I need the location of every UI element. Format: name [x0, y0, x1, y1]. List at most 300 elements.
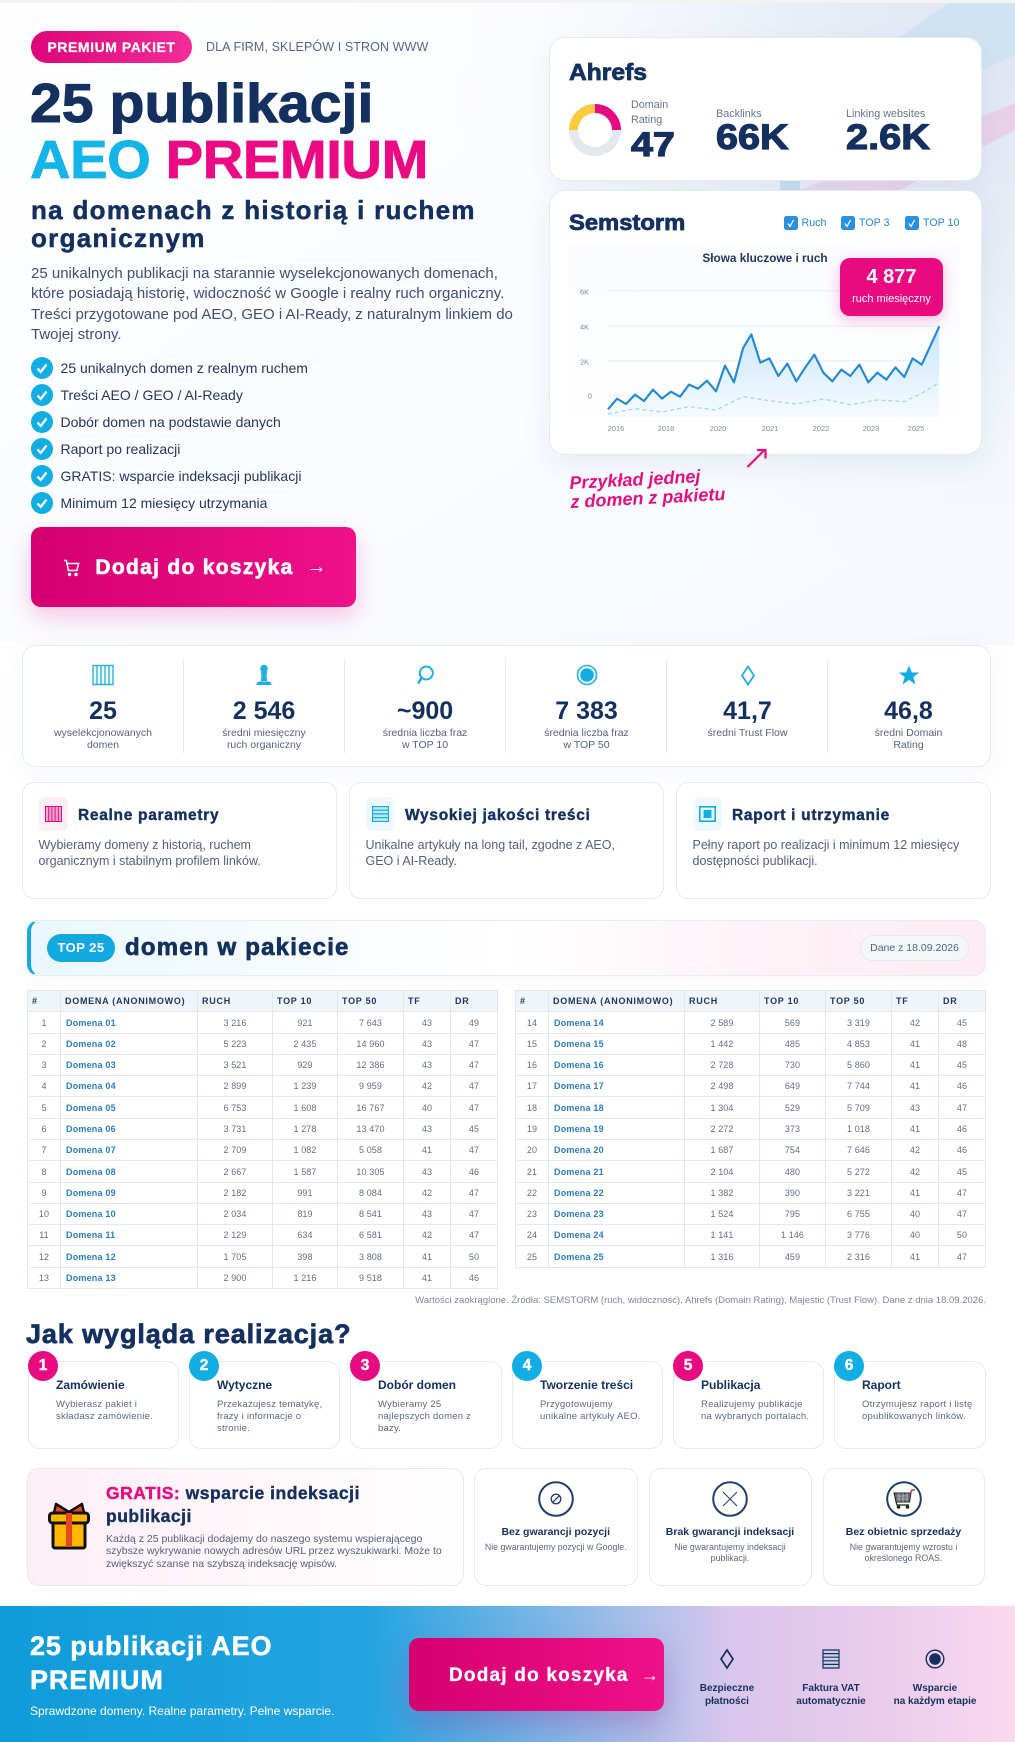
table: domeny 1-13: 2 899 — [223, 1081, 247, 1091]
stat: trust flow: średni Trust Flow — [708, 727, 787, 739]
line chart: słowa kluczowe i ruch: 2020 — [710, 424, 726, 433]
table: domeny 1-13: 10 — [39, 1209, 49, 1219]
table: domeny 14-25: 47 — [957, 1252, 967, 1262]
icon: parametry — [38, 797, 68, 831]
gratis text: zwiększyć szanse na szybszą indeksację wpisów. — [106, 1558, 337, 1570]
trust: faktura vat — [796, 1649, 866, 1707]
line chart: słowa kluczowe i ruch: 2K — [580, 358, 589, 366]
handwritten note: Przykład jednej — [569, 466, 701, 493]
line chart: słowa kluczowe i ruch: 2016 — [608, 424, 624, 433]
icon: raport — [692, 797, 722, 831]
table: domeny 1-13: TOP 10 — [277, 996, 312, 1006]
stat: trust flow: 41,7 — [723, 697, 772, 725]
table: domeny 14-25: 6 755 — [847, 1209, 870, 1219]
table: domeny 14-25: 41 — [910, 1188, 920, 1198]
step 4 — [512, 1360, 662, 1448]
stat: top 50: w TOP 50 — [563, 739, 610, 751]
section header: top 25 domen — [27, 920, 986, 976]
table: domeny 14-25: 1 146 — [781, 1230, 804, 1240]
table: domeny 1-13: 1 239 — [293, 1081, 317, 1091]
cta title: PREMIUM — [30, 1665, 164, 1695]
table: domeny 1-13: 921 — [297, 1018, 313, 1028]
cta subtitle: Sprawdzone domeny. Realne parametry. Pełne wsparcie. — [30, 1704, 334, 1718]
cta band — [0, 1606, 1015, 1742]
table: domeny 1-13: 47 — [469, 1188, 479, 1198]
table: domeny 1-13: Domena 09 — [66, 1188, 116, 1198]
table: domeny 1-13: 3 — [41, 1060, 47, 1070]
cta title: 25 publikacji AEO — [30, 1631, 272, 1661]
table: domeny 14-25: 459 — [785, 1252, 800, 1262]
table: domeny 14-25: 14 — [527, 1018, 537, 1028]
icon: no position — [538, 1481, 574, 1517]
table: domeny 14-25: Domena 21 — [554, 1166, 604, 1176]
table: domeny 1-13: 14 960 — [356, 1039, 385, 1049]
table: domeny 1-13: 12 — [39, 1252, 49, 1262]
subtitle — [31, 195, 476, 253]
title: AEO PREMIUM — [30, 130, 428, 190]
table: domeny 1-13: 9 959 — [359, 1081, 382, 1091]
table: domeny 14-25: 1 304 — [710, 1102, 734, 1112]
section heading: domen w pakiecie — [125, 934, 350, 961]
table: domeny 1-13: Domena 08 — [66, 1166, 116, 1176]
table: domeny 1-13: 41 — [422, 1252, 432, 1262]
table: domeny 14-25: Domena 14 — [554, 1018, 604, 1028]
table: domeny 14-25: 41 — [910, 1081, 920, 1091]
legend — [784, 216, 959, 230]
heading: jak wygląda realizacja: Jak wygląda realizacja? — [26, 1318, 351, 1348]
table: domeny 14-25: 2 589 — [710, 1018, 734, 1028]
step 3 — [350, 1360, 502, 1448]
table: domeny 14-25: 46 — [957, 1081, 967, 1091]
table: domeny 1-13: 13 — [39, 1273, 49, 1283]
trust: wsparcie: Wsparcie — [913, 1683, 957, 1694]
line chart: słowa kluczowe i ruch: 2023 — [863, 424, 879, 433]
metric: domain rating: Rating — [631, 114, 662, 126]
title — [30, 72, 428, 190]
table: domeny 1-13: 819 — [297, 1209, 313, 1219]
cta button — [409, 1638, 664, 1710]
table: domeny 1-13: 5 223 — [223, 1039, 247, 1049]
table: domeny 14-25 — [515, 990, 986, 1268]
arrow: to semstorm panel — [746, 448, 767, 468]
hero background — [0, 0, 1015, 645]
stat: domeny — [54, 664, 152, 751]
button: dodaj do koszyka — [31, 527, 356, 607]
table: domeny 1-13: 7 — [41, 1145, 47, 1155]
metric: domain rating — [630, 98, 675, 164]
button: dodaj do koszyka: Dodaj do koszyka — [95, 556, 294, 578]
table: domeny 1-13: 45 — [469, 1124, 479, 1134]
table: domeny 14-25: 1 018 — [847, 1124, 870, 1134]
icon: cart — [886, 1481, 922, 1517]
table: domeny 1-13: 43 — [422, 1039, 432, 1049]
table: domeny 14-25: 754 — [785, 1145, 800, 1155]
table: domeny 1-13: DR — [455, 996, 469, 1006]
step 5 — [672, 1360, 824, 1448]
table: domeny 14-25: 18 — [527, 1102, 537, 1112]
table: domeny 1-13: DOMENA (ANONIMOWO) — [65, 996, 185, 1006]
table: domeny 14-25: DR — [943, 996, 957, 1006]
table: domeny 14-25: 20 — [527, 1145, 537, 1155]
table: domeny 1-13: 43 — [422, 1209, 432, 1219]
table: domeny 14-25: 43 — [910, 1102, 920, 1112]
table: domeny 14-25: 16 — [527, 1060, 537, 1070]
intro paragraph: Twojej strony. — [31, 326, 122, 343]
table: domeny 1-13: Domena 06 — [66, 1124, 116, 1134]
gratis text: szybsze wykrywanie nowych adresów URL przez wyszukiwarki. Może to — [106, 1545, 442, 1557]
step 3: Dobór domen — [378, 1378, 456, 1392]
table: domeny 1-13: 47 — [469, 1145, 479, 1155]
stat: top 10: w TOP 10 — [402, 739, 448, 751]
step 5: Publikacja — [701, 1378, 760, 1392]
table: domeny 14-25: 7 646 — [847, 1145, 870, 1155]
stat: ruch: 2 546 — [233, 697, 295, 725]
table: domeny 1-13: 9 518 — [359, 1273, 382, 1283]
stat: ruch: średni miesięczny — [222, 727, 306, 739]
stat: top 50: 7 383 — [555, 697, 618, 725]
trust: faktura vat: Faktura VAT — [802, 1683, 860, 1694]
table: domeny 1-13: # — [32, 996, 38, 1006]
table: domeny 1-13: 10 305 — [356, 1166, 385, 1176]
table: domeny 14-25: 19 — [527, 1124, 537, 1134]
table: domeny 1-13: RUCH — [202, 996, 231, 1006]
table: domeny 1-13: 2 435 — [293, 1039, 317, 1049]
cta button: Dodaj do koszyka — [449, 1664, 629, 1686]
table: domeny 14-25: 45 — [957, 1166, 967, 1176]
table: domeny 14-25: 50 — [957, 1230, 967, 1240]
table: domeny 14-25: 529 — [785, 1102, 800, 1112]
gratis heading: publikacji — [106, 1506, 192, 1526]
card: bez gwarancji pozycji — [474, 1468, 638, 1586]
table: domeny 1-13: 47 — [469, 1081, 479, 1091]
table: domeny 14-25: 42 — [910, 1145, 920, 1155]
step 2: stronie. — [217, 1423, 250, 1434]
table: domeny 14-25: 41 — [910, 1060, 920, 1070]
step 2: Przekazujesz tematykę, — [217, 1399, 322, 1410]
table: domeny 1-13: 43 — [422, 1060, 432, 1070]
table: domeny 14-25: 5 272 — [847, 1166, 870, 1176]
table: domeny 1-13: 7 643 — [359, 1018, 382, 1028]
table: domeny 1-13: Domena 13 — [66, 1273, 116, 1283]
callout: ruch miesięczny: 4 877 — [866, 266, 917, 288]
kicker text: DLA FIRM, SKLEPÓW I STRON WWW — [206, 40, 428, 54]
feature card: realne parametry — [22, 782, 337, 898]
table: domeny 14-25: 25 — [527, 1252, 537, 1262]
table: domeny 14-25: 46 — [957, 1124, 967, 1134]
badge: premium pakiet: PREMIUM PAKIET — [48, 39, 176, 55]
table: domeny 1-13: 3 808 — [359, 1252, 382, 1262]
table: domeny 14-25: 390 — [785, 1188, 800, 1198]
handwritten note — [569, 466, 726, 512]
table: domeny 14-25: # — [520, 996, 526, 1006]
table: domeny 1-13: 47 — [469, 1102, 479, 1112]
stat: domain rating: Rating — [893, 739, 924, 751]
table: domeny 1-13: Domena 02 — [66, 1039, 116, 1049]
step 4: Tworzenie treści — [540, 1378, 633, 1392]
subtitle: organicznym — [31, 222, 206, 252]
card: brak gwarancji indeksacji: publikacji. — [711, 1552, 749, 1562]
table: domeny 1-13: 41 — [422, 1273, 432, 1283]
card: brak gwarancji indeksacji: Nie gwarantujemy indeksacji — [674, 1542, 786, 1552]
intro paragraph — [31, 264, 513, 343]
table: domeny 1-13: 43 — [422, 1166, 432, 1176]
table: domeny 1-13: 40 — [422, 1102, 432, 1112]
step 1 — [28, 1360, 178, 1448]
table: domeny 1-13: Domena 07 — [66, 1145, 116, 1155]
metric: backlinks: Backlinks — [716, 108, 762, 120]
stat: top 50 — [544, 664, 629, 751]
table: domeny 1-13: 47 — [469, 1039, 479, 1049]
table: domeny 1-13: Domena 12 — [66, 1252, 116, 1262]
stat: top 10 — [383, 666, 467, 751]
table: domeny 1-13: 16 767 — [356, 1102, 385, 1112]
stat: top 50: średnia liczba fraz — [544, 727, 629, 739]
table: domeny 1-13: Domena 04 — [66, 1081, 116, 1091]
gratis text — [106, 1532, 442, 1570]
table: domeny 1-13: 1 705 — [223, 1252, 247, 1262]
table: domeny 14-25: 3 221 — [847, 1188, 870, 1198]
table: domeny 1-13: 2 129 — [223, 1230, 247, 1240]
step 1: Zamówienie — [56, 1378, 125, 1392]
footnote: Wartości zaokrąglone. Źródła: SEMSTORM (ruch, widoczność), Ahrefs (Domain Rating), Majestic (Trust Flow). Dane z dnia 18.09.2026. — [415, 1294, 986, 1306]
table: domeny 1-13: 2 182 — [223, 1188, 247, 1198]
table: domeny 14-25: 22 — [527, 1188, 537, 1198]
line chart: słowa kluczowe i ruch: 6K — [580, 288, 589, 296]
trust: wsparcie — [894, 1650, 976, 1707]
icon: cross — [712, 1481, 748, 1517]
table: domeny 1-13 — [27, 990, 498, 1289]
table: domeny 1-13: 634 — [297, 1230, 313, 1240]
table: domeny 1-13: Domena 05 — [66, 1102, 116, 1112]
table: domeny 1-13: 3 731 — [223, 1124, 247, 1134]
table: domeny 14-25: 5 860 — [847, 1060, 870, 1070]
table: domeny 14-25: Domena 20 — [554, 1145, 604, 1155]
table: domeny 1-13: 4 — [41, 1081, 47, 1091]
stat: ruch — [222, 664, 306, 751]
intro paragraph: 25 unikalnych publikacji na starannie wyselekcjonowanych domenach, — [31, 264, 498, 282]
step 5: 5 — [684, 1357, 692, 1374]
table: domeny 14-25: 45 — [957, 1018, 967, 1028]
step 1: 1 — [39, 1357, 47, 1374]
feature card: realne parametry: Realne parametry — [78, 806, 219, 824]
table: domeny 14-25: 47 — [957, 1209, 967, 1219]
table: domeny 14-25: 1 687 — [710, 1145, 734, 1155]
table: domeny 14-25: Domena 19 — [554, 1124, 604, 1134]
feature card: raport i utrzymanie — [676, 782, 991, 898]
feature card: raport i utrzymanie: Pełny raport po realizacji i minimum 12 miesięcy — [692, 838, 959, 852]
table: domeny 14-25: TOP 50 — [830, 996, 865, 1006]
card: bez obietnic sprzedaży: Bez obietnic sprzedaży — [846, 1526, 961, 1538]
checklist: Raport po realizacji — [60, 440, 180, 456]
table: domeny 14-25: 17 — [527, 1081, 537, 1091]
table: domeny 1-13: 11 — [39, 1230, 49, 1240]
table: domeny 14-25: 42 — [910, 1166, 920, 1176]
step 4: Przygotowujemy — [540, 1399, 613, 1410]
stat: domeny: 25 — [89, 697, 117, 725]
table: domeny 1-13: 8 541 — [359, 1209, 382, 1219]
step 3: 3 — [361, 1357, 369, 1374]
line chart: słowa kluczowe i ruch: 2025 — [908, 424, 924, 433]
step 6 — [834, 1360, 986, 1448]
card: brak gwarancji indeksacji: Brak gwarancji indeksacji — [666, 1526, 794, 1538]
metric: domain rating: Domain — [631, 98, 668, 110]
table: domeny 1-13: 49 — [469, 1018, 479, 1028]
badge: top 25: TOP 25 — [57, 940, 105, 955]
table: domeny 1-13: 929 — [297, 1060, 313, 1070]
line chart: słowa kluczowe i ruch: 4K — [580, 322, 589, 332]
line chart: słowa kluczowe i ruch: 2021 — [762, 424, 778, 433]
feature card: wysokiej jakości treści — [349, 782, 664, 898]
feature card: realne parametry: organicznym i stabilnym profilem linków. — [38, 854, 261, 868]
table: domeny 14-25: 2 316 — [847, 1252, 870, 1262]
table: domeny 1-13: 6 — [41, 1124, 47, 1134]
step 6: 6 — [845, 1357, 853, 1374]
table: domeny 1-13: 5 — [41, 1102, 47, 1112]
table: domeny 1-13: 2 667 — [223, 1166, 247, 1176]
table: domeny 14-25: 2 272 — [710, 1124, 734, 1134]
table: domeny 14-25: Domena 17 — [554, 1081, 604, 1091]
table: domeny 1-13: 9 — [41, 1188, 47, 1198]
stat: trust flow — [708, 665, 788, 739]
table: domeny 1-13: TOP 50 — [342, 996, 377, 1006]
table: domeny 1-13: 3 216 — [223, 1018, 247, 1028]
trust: wsparcie: na każdym etapie — [894, 1696, 976, 1707]
table: domeny 1-13: 47 — [469, 1230, 479, 1240]
feature card: realne parametry: Wybieramy domeny z historią, ruchem — [38, 838, 251, 852]
metric: linking websites: Linking websites — [846, 108, 925, 120]
table: domeny 14-25: 569 — [785, 1018, 800, 1028]
line chart: słowa kluczowe i ruch: 0 — [588, 392, 592, 400]
subtitle: na domenach z historią i ruchem — [31, 195, 476, 225]
table: domeny 14-25: 47 — [957, 1102, 967, 1112]
table: domeny 14-25: 41 — [910, 1252, 920, 1262]
table: domeny 1-13: 1 082 — [293, 1145, 317, 1155]
table: domeny 1-13: Domena 11 — [66, 1230, 115, 1240]
table: domeny 1-13: 46 — [469, 1166, 479, 1176]
stat: domain rating — [875, 666, 942, 751]
stat: top 10: średnia liczba fraz — [383, 727, 467, 739]
badge: data: Dane z 18.09.2026 — [870, 942, 959, 954]
table: domeny 1-13: 2 709 — [223, 1145, 247, 1155]
table: domeny 14-25: 649 — [785, 1081, 800, 1091]
table: domeny 14-25: 730 — [785, 1060, 800, 1070]
table: domeny 14-25: Domena 23 — [554, 1209, 604, 1219]
step 3: najlepszych domen z — [378, 1411, 471, 1422]
cta button: → — [641, 1665, 659, 1685]
table: domeny 14-25: 41 — [910, 1039, 920, 1049]
table: domeny 1-13: 8 — [41, 1166, 47, 1176]
table: domeny 14-25: 41 — [910, 1124, 920, 1134]
step 3: Wybieramy 25 — [378, 1399, 441, 1410]
table: domeny 14-25: 24 — [527, 1230, 537, 1240]
table: domeny 14-25: 373 — [785, 1124, 800, 1134]
table: domeny 1-13: 6 753 — [223, 1102, 247, 1112]
table: domeny 14-25: TF — [896, 996, 908, 1006]
table: domeny 1-13: 46 — [469, 1273, 479, 1283]
stat: domeny: domen — [87, 739, 119, 751]
table: domeny 1-13: 47 — [469, 1060, 479, 1070]
table: domeny 1-13: Domena 10 — [66, 1209, 116, 1219]
step 1: składasz zamówienie. — [56, 1411, 153, 1422]
table: domeny 14-25: 1 141 — [710, 1230, 734, 1240]
feature card: wysokiej jakości treści: Wysokiej jakości treści — [405, 806, 591, 824]
table: domeny 14-25: 3 319 — [847, 1018, 870, 1028]
table: domeny 1-13: 13 470 — [356, 1124, 385, 1134]
table: domeny 14-25: 2 498 — [710, 1081, 734, 1091]
table: domeny 14-25: 15 — [527, 1039, 537, 1049]
step 5: Realizujemy publikacje — [701, 1399, 803, 1410]
gratis heading: GRATIS: wsparcie indeksacji — [106, 1482, 360, 1502]
gratis text: Każdą z 25 publikacji dodajemy do naszego systemu wspierającego — [106, 1532, 422, 1544]
table: domeny 14-25: Domena 15 — [554, 1039, 604, 1049]
table: domeny 14-25: 2 104 — [710, 1166, 734, 1176]
card: bez obietnic sprzedaży — [822, 1468, 984, 1586]
table: domeny 14-25: Domena 16 — [554, 1060, 604, 1070]
table: domeny 14-25: 3 776 — [847, 1230, 870, 1240]
step 2: 2 — [200, 1357, 208, 1374]
line chart: słowa kluczowe i ruch: Słowa kluczowe i ruch — [702, 251, 828, 265]
table: domeny 1-13: 3 521 — [223, 1060, 247, 1070]
card: bez obietnic sprzedaży: określonego ROAS. — [865, 1552, 942, 1562]
metric: domain rating: 47 — [631, 126, 675, 164]
badge: premium pakiet — [31, 31, 192, 63]
table: domeny 14-25: 40 — [910, 1209, 920, 1219]
checklist: Minimum 12 miesięcy utrzymania — [60, 494, 267, 510]
feature card: wysokiej jakości treści: Unikalne artykuły na long tail, zgodne z AEO, — [366, 838, 615, 852]
table: domeny 14-25: 2 728 — [710, 1060, 734, 1070]
legend: TOP 3 — [859, 217, 890, 229]
semstorm heading: Semstorm — [569, 210, 685, 235]
metric: backlinks: 66K — [716, 118, 789, 157]
feature card: raport i utrzymanie: Raport i utrzymanie — [732, 806, 890, 824]
table: domeny 1-13: 2 034 — [223, 1209, 247, 1219]
table: domeny 1-13: 1 278 — [293, 1124, 317, 1134]
stat: domeny: wyselekcjonowanych — [54, 727, 152, 739]
table: domeny 14-25: 1 382 — [710, 1188, 734, 1198]
step 6: Raport — [862, 1378, 901, 1392]
step 3: bazy. — [378, 1423, 401, 1434]
icon: gift — [48, 1502, 90, 1550]
table: domeny 1-13: 6 581 — [359, 1230, 382, 1240]
table: domeny 1-13: 5 058 — [359, 1145, 382, 1155]
table: domeny 14-25: 4 853 — [847, 1039, 870, 1049]
step 6: opublikowanych linków. — [862, 1411, 966, 1422]
badge: top 25 — [47, 934, 115, 962]
metric: linking websites: 2.6K — [846, 118, 930, 157]
panel: gratis — [27, 1468, 464, 1586]
table: domeny 14-25: 46 — [957, 1145, 967, 1155]
table: domeny 1-13: 50 — [469, 1252, 479, 1262]
ahrefs heading: Ahrefs — [569, 59, 647, 85]
table: domeny 14-25: 48 — [957, 1039, 967, 1049]
stat: domain rating: średni Domain — [875, 727, 942, 739]
table: domeny 1-13: 991 — [297, 1188, 313, 1198]
handwritten note: z domen z pakietu — [570, 484, 726, 512]
table: domeny 14-25: 40 — [910, 1230, 920, 1240]
table: domeny 1-13: 2 — [41, 1039, 47, 1049]
step 5: na wybranych portalach. — [701, 1411, 809, 1422]
card: bez obietnic sprzedaży: Nie gwarantujemy wzrostu i — [850, 1542, 957, 1552]
table: domeny 1-13: Domena 03 — [66, 1060, 116, 1070]
card: bez gwarancji pozycji: Nie gwarantujemy pozycji w Google. — [485, 1542, 627, 1552]
table: domeny 14-25: Domena 24 — [554, 1230, 604, 1240]
table: domeny 14-25: Domena 25 — [554, 1252, 604, 1262]
line chart: słowa kluczowe i ruch: 2022 — [813, 424, 829, 433]
callout: ruch miesięczny: ruch miesięczny — [852, 293, 931, 305]
checklist: Treści AEO / GEO / AI-Ready — [60, 386, 243, 402]
panel: key stats — [22, 645, 991, 767]
table: domeny 1-13: 398 — [297, 1252, 313, 1262]
